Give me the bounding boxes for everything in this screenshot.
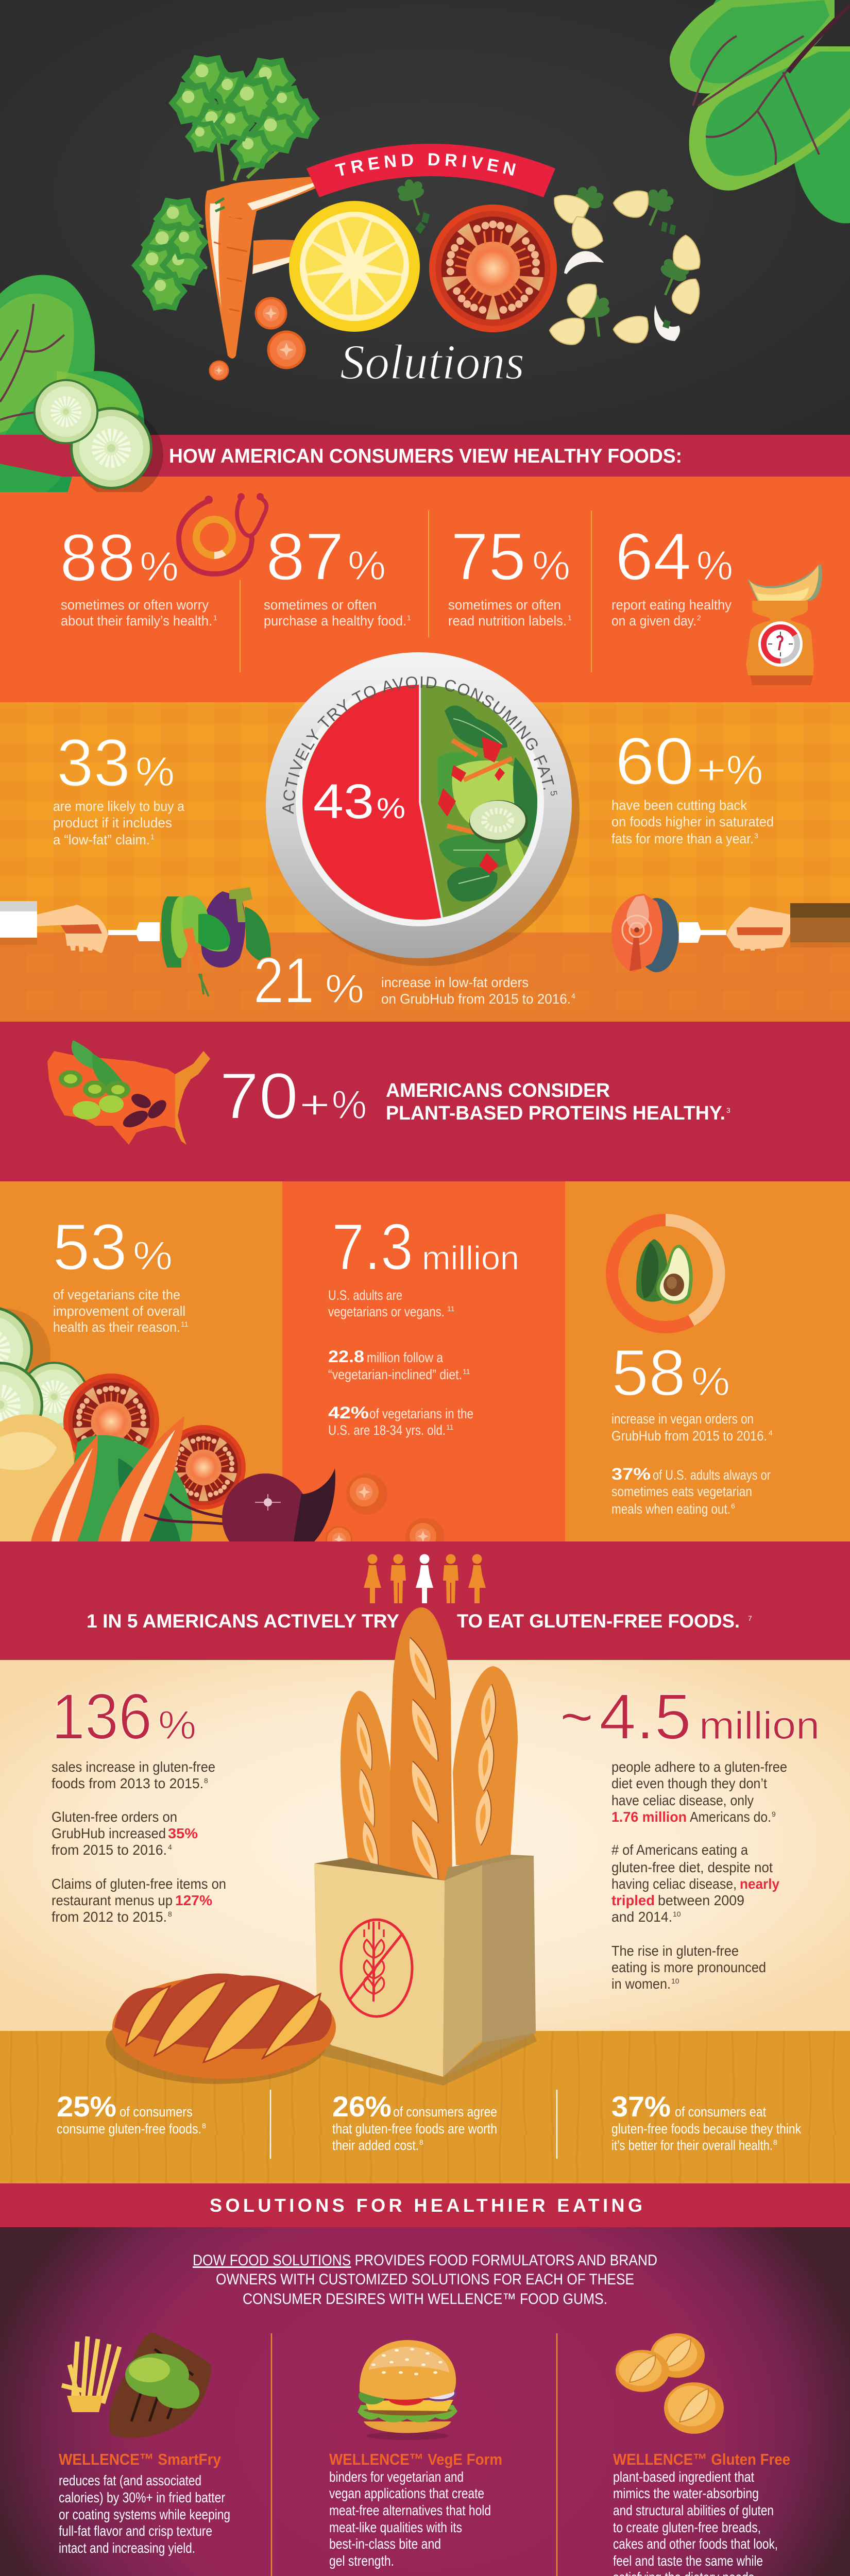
stat: 26% of consumers (332, 2090, 497, 2153)
text: Gluten Free description: cakes and other foods that look, (613, 2536, 778, 2552)
text: VegE Form description (329, 2469, 491, 2569)
text: 33% description: 1 (150, 833, 155, 841)
text: vegetarian counts: 11 (447, 1304, 455, 1313)
chart: plate pie 43%: 5 (550, 791, 557, 795)
text: 33% description: a “low-fat” claim. (53, 832, 150, 848)
value: 43%: % (377, 792, 405, 825)
crimson heading band (0, 435, 850, 477)
text: gluten-free diet adherence: tripled (611, 1892, 655, 1908)
stat: 58%: % (691, 1359, 730, 1404)
text: 21% description: increase in low-fat orders (381, 975, 529, 990)
illustration: baguettes in bag with gluten-free mark (314, 1607, 537, 2086)
text: gluten-free diet adherence: 1.76 million (611, 1809, 687, 1825)
text: VegE Form description: gel strength. (329, 2553, 394, 2569)
panel: vegetarian statistics (0, 1181, 850, 1561)
stat: 37% of consumers: gluten-free foods because they think (611, 2121, 801, 2137)
heading: plant-based proteins: 3 (726, 1106, 730, 1114)
text: 53% description: health as their reason. (53, 1319, 180, 1335)
text: 60+% description: have been cutting back (611, 798, 747, 813)
text: vegetarian counts: 42% (328, 1403, 369, 1422)
text: 75% description: sometimes or often (448, 597, 561, 613)
stat: 26% of consumers: of consumers agree (393, 2104, 497, 2120)
text: vegan orders: increase in vegan orders on (611, 1411, 754, 1427)
text: SmartFry description: full-fat flavor and crisp texture (59, 2523, 212, 2539)
heading: WELLENCE VegE Form: WELLENCE™ VegE Form (329, 2450, 502, 2468)
text: vegetarian counts: “vegetarian-inclined” diet. (328, 1367, 462, 1382)
stat: 26% of consumers: that gluten-free foods are worth (332, 2121, 497, 2137)
stat: ~4.5 million: 4.5 (599, 1681, 691, 1753)
salad on plate (438, 705, 545, 902)
icon: cucumber slices (0, 379, 163, 507)
text: 21% description: 4 (571, 992, 575, 1000)
text: 21% description: on GrubHub from 2015 to 2016. (381, 991, 571, 1007)
text: 64% description: 2 (697, 614, 701, 622)
panel: consumer stats (0, 492, 850, 702)
text: SmartFry description: or coating systems while keeping (59, 2506, 230, 2522)
icon: melon on kitchen scale (746, 564, 822, 685)
stat: 33%: 33 (57, 725, 130, 800)
crimson heading band: HOW AMERICAN CONSUMERS VIEW HEALTHY FOODS: (169, 445, 682, 467)
text: 75% description: 1 (568, 614, 572, 622)
text: vegetarian counts: 11 (463, 1367, 470, 1376)
text: gluten-free sales: 8 (204, 1776, 208, 1785)
icon: veggie burger (358, 2340, 457, 2440)
text: gluten-free diet adherence: between 2009 (658, 1892, 744, 1908)
text: 75% description: read nutrition labels. (448, 613, 567, 629)
heading: 1 in 5 Americans: 7 (748, 1614, 752, 1622)
decoration: carrot slices (326, 1473, 445, 1557)
stat: 37% of consumers: of consumers eat (675, 2104, 766, 2120)
text: vegan orders: 37% (611, 1465, 651, 1483)
illustration: vegetable pile (0, 1306, 335, 1561)
stat: 75% (451, 519, 570, 594)
text: gluten-free sales: Claims of gluten-free items on (52, 1876, 226, 1892)
text: gluten-free diet adherence: and 2014. (611, 1909, 672, 1925)
text: Dow Food Solutions intro (193, 2252, 657, 2308)
text: vegan orders: sometimes eats vegetarian (611, 1484, 752, 1499)
stat: 25% of consumers: 8 (202, 2122, 206, 2130)
text: gluten-free diet adherence: nearly (740, 1876, 779, 1892)
stat: 60+%: + (696, 747, 726, 793)
heading: plant-based proteins (386, 1080, 730, 1124)
heading: 1 in 5 Americans (87, 1611, 752, 1632)
orange base strip (0, 477, 850, 492)
stat: 37% of consumers: 37% (611, 2090, 671, 2123)
stat: 53%: 53 (53, 1210, 127, 1283)
stat: 25% of consumers: of consumers (120, 2104, 193, 2120)
text: 33% description: product if it includes (53, 815, 172, 831)
text: 53% description: improvement of overall (53, 1303, 185, 1319)
text: 33% description: are more likely to buy a (53, 799, 185, 814)
title ribbon (307, 144, 555, 197)
text: VegE Form description: vegan applications that create (329, 2485, 484, 2501)
icon: stethoscope (179, 493, 266, 574)
stat: ~4.5 million: million (699, 1704, 820, 1747)
stat: 87% (266, 519, 386, 594)
text: vegan orders: GrubHub from 2015 to 2016. (611, 1428, 767, 1444)
text: gluten-free sales: from 2015 to 2016. (52, 1842, 167, 1858)
icon: crossed wheat (341, 1920, 412, 2016)
text: 21% description (381, 975, 575, 1007)
text: VegE Form description: best-in-class bite and (329, 2536, 441, 2552)
text: vegetarian counts: of vegetarians in the (369, 1406, 473, 1421)
text: vegan orders: 4 (769, 1429, 773, 1437)
text: 33% description (53, 799, 185, 848)
text: SmartFry description: reduces fat (and associated (59, 2472, 201, 2488)
stat: 136%: 136 (52, 1681, 152, 1753)
stat: 21%: 21 (253, 945, 314, 1016)
text: 87% description (264, 597, 411, 629)
stat: 33%: % (135, 749, 175, 794)
stat: 88% (60, 520, 179, 595)
text: gluten-free sales: 4 (168, 1843, 172, 1851)
leaves: bottom left with cucumbers (0, 275, 145, 510)
letter O: lemon (289, 201, 420, 332)
stat: 75%: % (532, 543, 570, 588)
text: vegetarian counts: million follow a (367, 1350, 444, 1365)
text: 53% description (53, 1287, 189, 1335)
icon: US map with beans (47, 1040, 210, 1145)
text: 64% description (611, 597, 732, 629)
text: 88% description: about their family’s health. (61, 613, 212, 629)
heading: plant-based proteins: PLANT-BASED PROTEINS HEALTHY. (386, 1103, 725, 1124)
text: gluten-free diet adherence: The rise in gluten-free (611, 1943, 739, 1959)
text: gluten-free diet adherence: 10 (671, 1977, 679, 1985)
stat: 60+% (615, 723, 763, 799)
illustration: bread loaf (106, 1973, 336, 2084)
stat: 58%: 58 (611, 1336, 686, 1409)
stat: 60+%: 60 (615, 723, 694, 799)
text: SmartFry description (59, 2472, 230, 2556)
text: 60+% description: fats for more than a year. (611, 831, 754, 846)
text: gluten-free diet adherence: diet even though they don’t (611, 1775, 767, 1791)
panel: hero title (0, 0, 850, 529)
value: 43% (313, 774, 405, 829)
text: Dow Food Solutions intro: CONSUMER DESIRES WITH WELLENCE™ FOOD GUMS. (243, 2291, 607, 2308)
leaves: top right (670, 0, 850, 224)
stat: 25% of consumers: consume gluten-free foods. (57, 2121, 201, 2137)
heading: WELLENCE Gluten Free: WELLENCE™ Gluten Free (613, 2450, 790, 2468)
text: vegetarian counts: U.S. adults are (328, 1287, 402, 1303)
text: gluten-free diet adherence: 9 (772, 1810, 776, 1818)
stat: 26% of consumers: 26% (332, 2090, 392, 2123)
icon: right hand with fork and salmon (611, 894, 850, 972)
icon: left hand with fork and vegetables (0, 887, 271, 996)
stat: 25% of consumers (57, 2090, 206, 2137)
text: VegE Form description: binders for vegetarian and (329, 2469, 464, 2485)
text: Dow Food Solutions intro: DOW FOOD SOLUTIONS PROVIDES FOOD FORMULATORS AND BRAND (193, 2252, 657, 2269)
text: Gluten Free description: plant-based ingredient that (613, 2469, 754, 2485)
stat: 26% of consumers: 8 (419, 2138, 423, 2146)
text: gluten-free sales: foods from 2013 to 2015. (52, 1775, 203, 1791)
text: vegan orders: meals when eating out. (611, 1501, 730, 1517)
stat: 70+%: 70 (219, 1059, 298, 1132)
stat: 87%: % (348, 543, 386, 588)
stat: 37% of consumers (611, 2090, 801, 2153)
stat: 70+% (219, 1059, 367, 1132)
text: 75% description (448, 597, 572, 629)
stat: ~4.5 million (560, 1681, 820, 1753)
text: 60+% description: 3 (754, 832, 758, 840)
chart: donut with avocado (612, 1220, 719, 1327)
text: gluten-free sales: sales increase in gluten-free (52, 1759, 215, 1775)
text: vegan orders: 6 (731, 1502, 735, 1510)
text: Gluten Free description: to create gluten-free breads, (613, 2519, 761, 2535)
heading: solutions for healthier eating: SOLUTIONS FOR HEALTHIER EATING (210, 2195, 642, 2216)
text: gluten-free sales: 8 (168, 1910, 172, 1918)
stat: 58% (611, 1336, 730, 1409)
stat: ~4.5 million: ~ (560, 1681, 593, 1753)
icon: fries and steak (62, 2332, 211, 2438)
text: 53% description: of vegetarians cite the (53, 1287, 180, 1302)
text: vegetarian counts: 11 (446, 1423, 454, 1431)
text: gluten-free diet adherence: gluten-free diet, despite not (611, 1859, 773, 1875)
text: SmartFry description: calories) by 30%+ in fried batter (59, 2489, 225, 2505)
stat: 88%: % (140, 544, 179, 589)
letter O: tomato (429, 205, 557, 332)
text: Gluten Free description (613, 2469, 778, 2576)
text: Gluten Free description: mimics the water-absorbing (613, 2485, 759, 2501)
letter D: garlic and parsley (394, 176, 703, 348)
stat: 7.3 million (332, 1210, 519, 1283)
letter F: carrots (205, 175, 336, 359)
panel: solutions (0, 2183, 850, 2576)
text: 60+% description (611, 798, 774, 846)
stat: 70+%: + (299, 1082, 330, 1127)
text: gluten-free diet adherence: eating is more pronounced (611, 1959, 766, 1975)
stat: 37% of consumers: 8 (773, 2138, 777, 2146)
text: gluten-free diet adherence: having celiac disease, (611, 1876, 737, 1892)
text: gluten-free sales: from 2012 to 2015. (52, 1909, 167, 1925)
text: gluten-free sales: 35% (168, 1825, 198, 1841)
stat: 64%: 64 (615, 519, 691, 594)
stat: 70+%: % (332, 1082, 367, 1127)
text: gluten-free sales: GrubHub increased (52, 1825, 166, 1841)
text: 88% description: 1 (213, 614, 217, 622)
heading: 1 in 5 Americans: 1 IN 5 AMERICANS ACTIVELY TRY (87, 1611, 399, 1632)
stat: 37% of consumers: it’s better for their overall health. (611, 2138, 773, 2153)
stat: 21%: % (325, 966, 364, 1011)
title ribbon: TREND DRIVEN (335, 153, 516, 176)
chart: plate pie 43% (266, 652, 580, 966)
stat: 53%: % (133, 1233, 173, 1278)
text: Gluten Free description: and structural abilities of gluten (613, 2502, 774, 2518)
stat: 53% (53, 1210, 173, 1283)
heading: 1 in 5 Americans: TO EAT GLUTEN-FREE FOODS. (457, 1611, 740, 1632)
text: 64% description: on a given day. (611, 613, 696, 629)
panel: gluten free (0, 1541, 850, 2183)
stat: 136%: % (158, 1702, 196, 1748)
subtitle: Solutions: Solutions (340, 334, 524, 389)
text: gluten-free sales: restaurant menus up (52, 1892, 173, 1908)
text: gluten-free sales: 127% (175, 1892, 212, 1908)
greens: top bunch (168, 55, 320, 181)
text: gluten-free diet adherence: 10 (673, 1910, 681, 1918)
heading: plant-based proteins: AMERICANS CONSIDER (386, 1080, 610, 1101)
text: gluten-free diet adherence: Americans do. (690, 1809, 771, 1825)
text: 88% description (61, 597, 217, 629)
greens: left bunch (131, 197, 209, 311)
text: 60+% description: on foods higher in saturated (611, 814, 774, 829)
text: 87% description: purchase a healthy food. (264, 613, 406, 629)
text: Dow Food Solutions intro: OWNERS WITH CUSTOMIZED SOLUTIONS FOR EACH OF THESE (216, 2271, 634, 2288)
stat: 75%: 75 (451, 519, 526, 594)
text: vegetarian counts (328, 1287, 473, 1438)
text: VegE Form description: meat-like qualities with its (329, 2519, 462, 2535)
stat: 7.3 million: 7.3 (332, 1210, 413, 1283)
icon: gluten-free rolls (616, 2333, 724, 2434)
text: 87% description: 1 (407, 614, 411, 622)
stat: 64% (615, 519, 733, 594)
text: vegetarian counts: vegetarians or vegans. (328, 1304, 445, 1319)
text: 88% description: sometimes or often worry (61, 597, 209, 613)
text: vegetarian counts: U.S. are 18-34 yrs. old. (328, 1422, 446, 1438)
stat: 64%: % (696, 543, 733, 588)
text: gluten-free diet adherence: # of Americans eating a (611, 1842, 748, 1858)
text: vegan orders: of U.S. adults always or (653, 1467, 771, 1483)
text: gluten-free sales (52, 1759, 226, 1925)
text: 64% description: report eating healthy (611, 597, 732, 613)
text: Gluten Free description: feel and taste the same while (613, 2553, 763, 2569)
text: 87% description: sometimes or often (264, 597, 377, 613)
text: gluten-free diet adherence (611, 1759, 787, 1992)
text: gluten-free diet adherence: have celiac disease, only (611, 1792, 754, 1808)
stat: 21% (253, 945, 364, 1016)
text: gluten-free diet adherence: in women. (611, 1976, 671, 1992)
carrot slices (209, 297, 306, 380)
text: 53% description: 11 (181, 1320, 189, 1328)
panel: plant-based proteins (0, 1022, 850, 1181)
stat: 87%: 87 (266, 519, 344, 594)
stat: 88%: 88 (60, 520, 135, 595)
panel: fat avoidance (0, 652, 850, 1022)
stat: 60+%: % (726, 747, 763, 793)
text: SmartFry description: intact and increasing yield. (59, 2540, 195, 2556)
text: gluten-free sales: Gluten-free orders on (52, 1809, 177, 1825)
value: 43%: 43 (313, 774, 374, 829)
icon: five people, one highlighted (364, 1554, 486, 1603)
stat: 25% of consumers: 25% (57, 2090, 116, 2123)
text: vegetarian counts: 22.8 (328, 1347, 364, 1366)
stat: 7.3 million: million (422, 1239, 519, 1277)
curved caption on plate rim (294, 688, 546, 814)
text: VegE Form description: meat-free alternatives that hold (329, 2502, 491, 2518)
text: vegan orders (611, 1411, 773, 1517)
text: gluten-free diet adherence: people adhere to a gluten-free (611, 1759, 787, 1775)
stat: 26% of consumers: their added cost. (332, 2138, 419, 2153)
chart: plate pie 43%: ACTIVELY TRY TO AVOID CONSUMING FAT. (282, 676, 554, 814)
heading: WELLENCE SmartFry: WELLENCE™ SmartFry (59, 2450, 222, 2468)
stat: 33% (57, 725, 175, 800)
